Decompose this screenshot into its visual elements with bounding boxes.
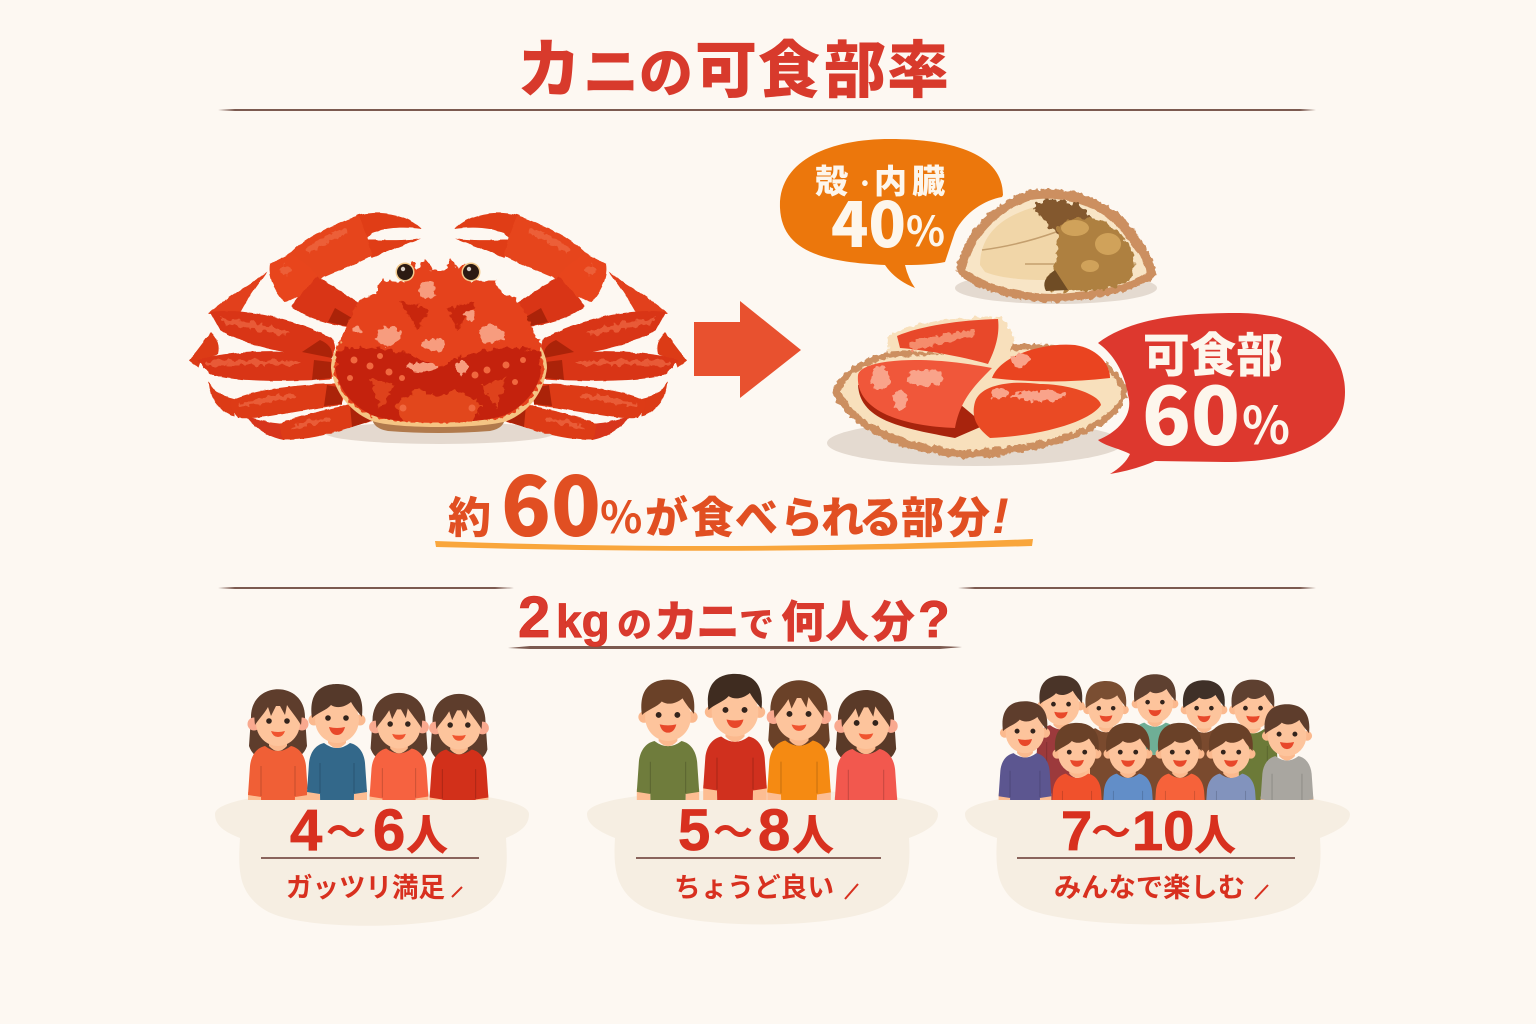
title: 食 [758,20,820,110]
headline: about 60% edible: 部 [901,484,944,546]
title: の [639,29,693,108]
caption: ちょうど良い [674,866,834,905]
count: 人 [406,802,448,863]
callout value: 60 [1142,353,1240,469]
crab shell [331,258,547,427]
crab eyes [396,262,480,282]
title: 可 [695,20,757,110]
section heading: ? [918,591,950,649]
illustration: whole red crab [189,213,687,444]
title: 部 [824,20,886,110]
divider lines [218,587,1316,649]
title: 率 [887,20,949,110]
headline: about 60% edible: % [600,482,642,546]
callout label: 臓 [912,155,945,203]
callout percent sign: % [906,198,945,258]
section heading: カ [654,586,698,650]
group of 4 people [248,684,489,800]
headline: about 60% edible: 約 [448,484,491,546]
section heading: ニ [696,586,740,650]
count: 7 [1061,799,1092,862]
tick mark [845,884,858,899]
caption: みんなで楽しむ [1054,866,1245,905]
section heading: kg [556,595,610,647]
pot shape [215,790,529,926]
panel: 7-10 people [965,674,1350,924]
section heading: の [617,597,652,648]
illustration: edible meat in shell [827,317,1127,466]
tick mark [1255,885,1268,899]
callout: shell and innards 40% [780,139,1003,288]
callout percent sign: % [1242,384,1290,459]
callout label: 可食部 [1143,317,1283,386]
headline: about 60% edible: る [859,484,902,546]
count: 10 [1132,799,1194,862]
crab right legs and claw [454,213,687,440]
headline: about 60% edible: べ [735,484,778,546]
illustration: shell and innards [952,186,1157,304]
section heading: 2 [518,585,550,650]
count: 人 [792,802,834,863]
count: 5 [678,798,710,863]
section heading: 何 [781,586,825,650]
panel: 5-8 people [587,674,938,924]
crab left legs and claw [189,213,422,440]
callout: edible part 60% [1098,313,1345,474]
section heading: 分 [871,586,915,650]
count: 〜 [326,800,366,858]
count: 4 [290,798,322,863]
arrow [694,301,801,398]
title: カ [517,19,581,111]
crab underside [372,413,505,433]
count: 〜 [713,800,753,858]
group of 4 people [636,674,898,800]
headline: about 60% edible: が [645,484,688,546]
pot shape [965,790,1350,924]
pot shape [587,790,938,924]
headline: about 60% edible: 60 [501,441,601,560]
caption: ガッツリ満足 [286,866,445,905]
tick mark [452,887,462,897]
headline: about 60% edible: れ [821,484,864,546]
callout label: 殻 [815,155,848,203]
callout label: · [857,164,873,201]
headline: about 60% edible: ら [780,484,823,546]
count: 8 [758,798,790,863]
section heading: 人 [825,586,869,650]
group of 10 people [998,674,1314,800]
count: 〜 [1091,800,1131,858]
panel: 4-6 people [215,684,529,926]
headline: about 60% edible [435,441,1033,560]
count: 人 [1194,802,1236,863]
count: 6 [373,798,405,863]
title: ニ [583,28,639,109]
exclamation mark: ! [992,488,1009,544]
callout value: 40 [831,175,906,265]
callout label: 内 [874,155,907,203]
section heading: で [739,597,774,648]
headline: about 60% edible: 食 [691,484,734,546]
headline: about 60% edible: 分 [947,484,990,546]
